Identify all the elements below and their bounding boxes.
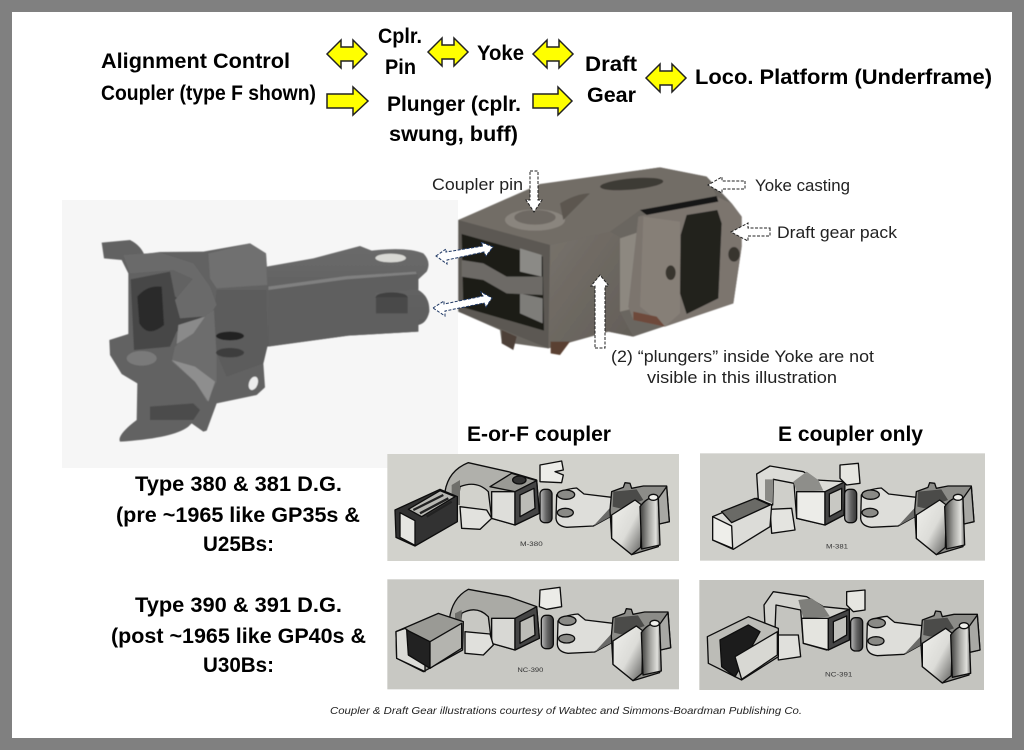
label: coupler pin: Cplr. bbox=[378, 25, 422, 48]
label: type 390 and 391 draft gear: (post ~1965 like GP40s & bbox=[111, 625, 366, 648]
panel: NC-390 drawing bbox=[387, 579, 679, 689]
arrow: yoke casting pointer bbox=[708, 177, 745, 193]
label: plungers note: visible in this illustration bbox=[647, 368, 837, 387]
label: type 380 and 381 draft gear: Type 380 & 381 D.G. bbox=[135, 473, 342, 496]
label: draft gear: Draft bbox=[585, 53, 637, 76]
label: type 390 and 391 draft gear bbox=[111, 594, 366, 677]
arrow: pin to yoke bbox=[428, 38, 468, 66]
label: draft gear pack: Draft gear pack bbox=[777, 223, 898, 242]
label: type 390 and 391 draft gear: U30Bs: bbox=[203, 654, 274, 677]
label: plunger: Plunger (cplr. bbox=[387, 93, 521, 116]
label: type 390 and 391 draft gear: Type 390 & 391 D.G. bbox=[135, 594, 342, 617]
panel: NC-390 drawing: NC-390 bbox=[517, 667, 544, 674]
illustration: yoke casting with draft gear pack bbox=[458, 167, 742, 355]
label: coupler pin: Pin bbox=[385, 56, 416, 79]
label: alignment control coupler bbox=[101, 50, 316, 105]
arrow: coupler to plunger bbox=[327, 87, 368, 115]
panel: M-381 drawing bbox=[700, 453, 985, 561]
label: plungers note bbox=[611, 347, 874, 387]
arrow: coupler pin pointer bbox=[526, 171, 542, 212]
label: type 380 and 381 draft gear: (pre ~1965 like GP35s & bbox=[116, 504, 360, 527]
arrow: lower plunger motion bbox=[433, 292, 492, 316]
arrow: coupler to pin bbox=[327, 40, 367, 68]
label: plungers note: (2) “plungers” inside Yoke are not bbox=[611, 347, 874, 366]
label: alignment control coupler: Coupler (type F shown) bbox=[101, 82, 316, 105]
arrow: plunger to draft gear bbox=[533, 87, 572, 115]
label: draft gear bbox=[585, 53, 637, 107]
arrow: upper plunger motion bbox=[436, 242, 493, 264]
label: yoke casting: Yoke casting bbox=[755, 176, 850, 195]
arrow: draft gear to platform bbox=[646, 64, 686, 92]
label: type 380 and 381 draft gear bbox=[116, 473, 360, 556]
panel: NC-391 drawing: NC-391 bbox=[825, 672, 853, 679]
arrow: yoke to draft gear bbox=[533, 40, 573, 68]
arrow: draft gear pack pointer bbox=[731, 223, 770, 241]
panel: NC-391 drawing bbox=[699, 580, 984, 690]
label: draft gear: Gear bbox=[587, 84, 636, 107]
panel: coupler photo background bbox=[62, 200, 458, 468]
label: alignment control coupler: Alignment Control bbox=[101, 50, 290, 73]
panel: M-380 drawing bbox=[387, 454, 679, 561]
heading: E coupler only: E coupler only bbox=[778, 423, 923, 446]
label: type 380 and 381 draft gear: U25Bs: bbox=[203, 533, 274, 556]
label: coupler pin bbox=[378, 25, 422, 79]
heading: force path flow diagram bbox=[101, 25, 992, 146]
heading: E-or-F coupler: E-or-F coupler bbox=[467, 423, 611, 446]
arrow: plungers pointer bbox=[591, 275, 609, 348]
label: locomotive platform: Loco. Platform (Underframe) bbox=[695, 66, 992, 89]
caption: image credit: Coupler & Draft Gear illustrations courtesy of Wabtec and Simmons-Boardman Publishing Co. bbox=[330, 705, 802, 717]
panel: M-381 drawing: M-381 bbox=[826, 544, 848, 551]
label: plunger: swung, buff) bbox=[389, 123, 518, 146]
label: yoke: Yoke bbox=[477, 42, 524, 65]
label: coupler pin: Coupler pin bbox=[432, 175, 523, 194]
label: plunger bbox=[387, 93, 521, 146]
panel: M-380 drawing: M-380 bbox=[520, 541, 543, 548]
illustration: type F coupler bbox=[102, 240, 429, 442]
